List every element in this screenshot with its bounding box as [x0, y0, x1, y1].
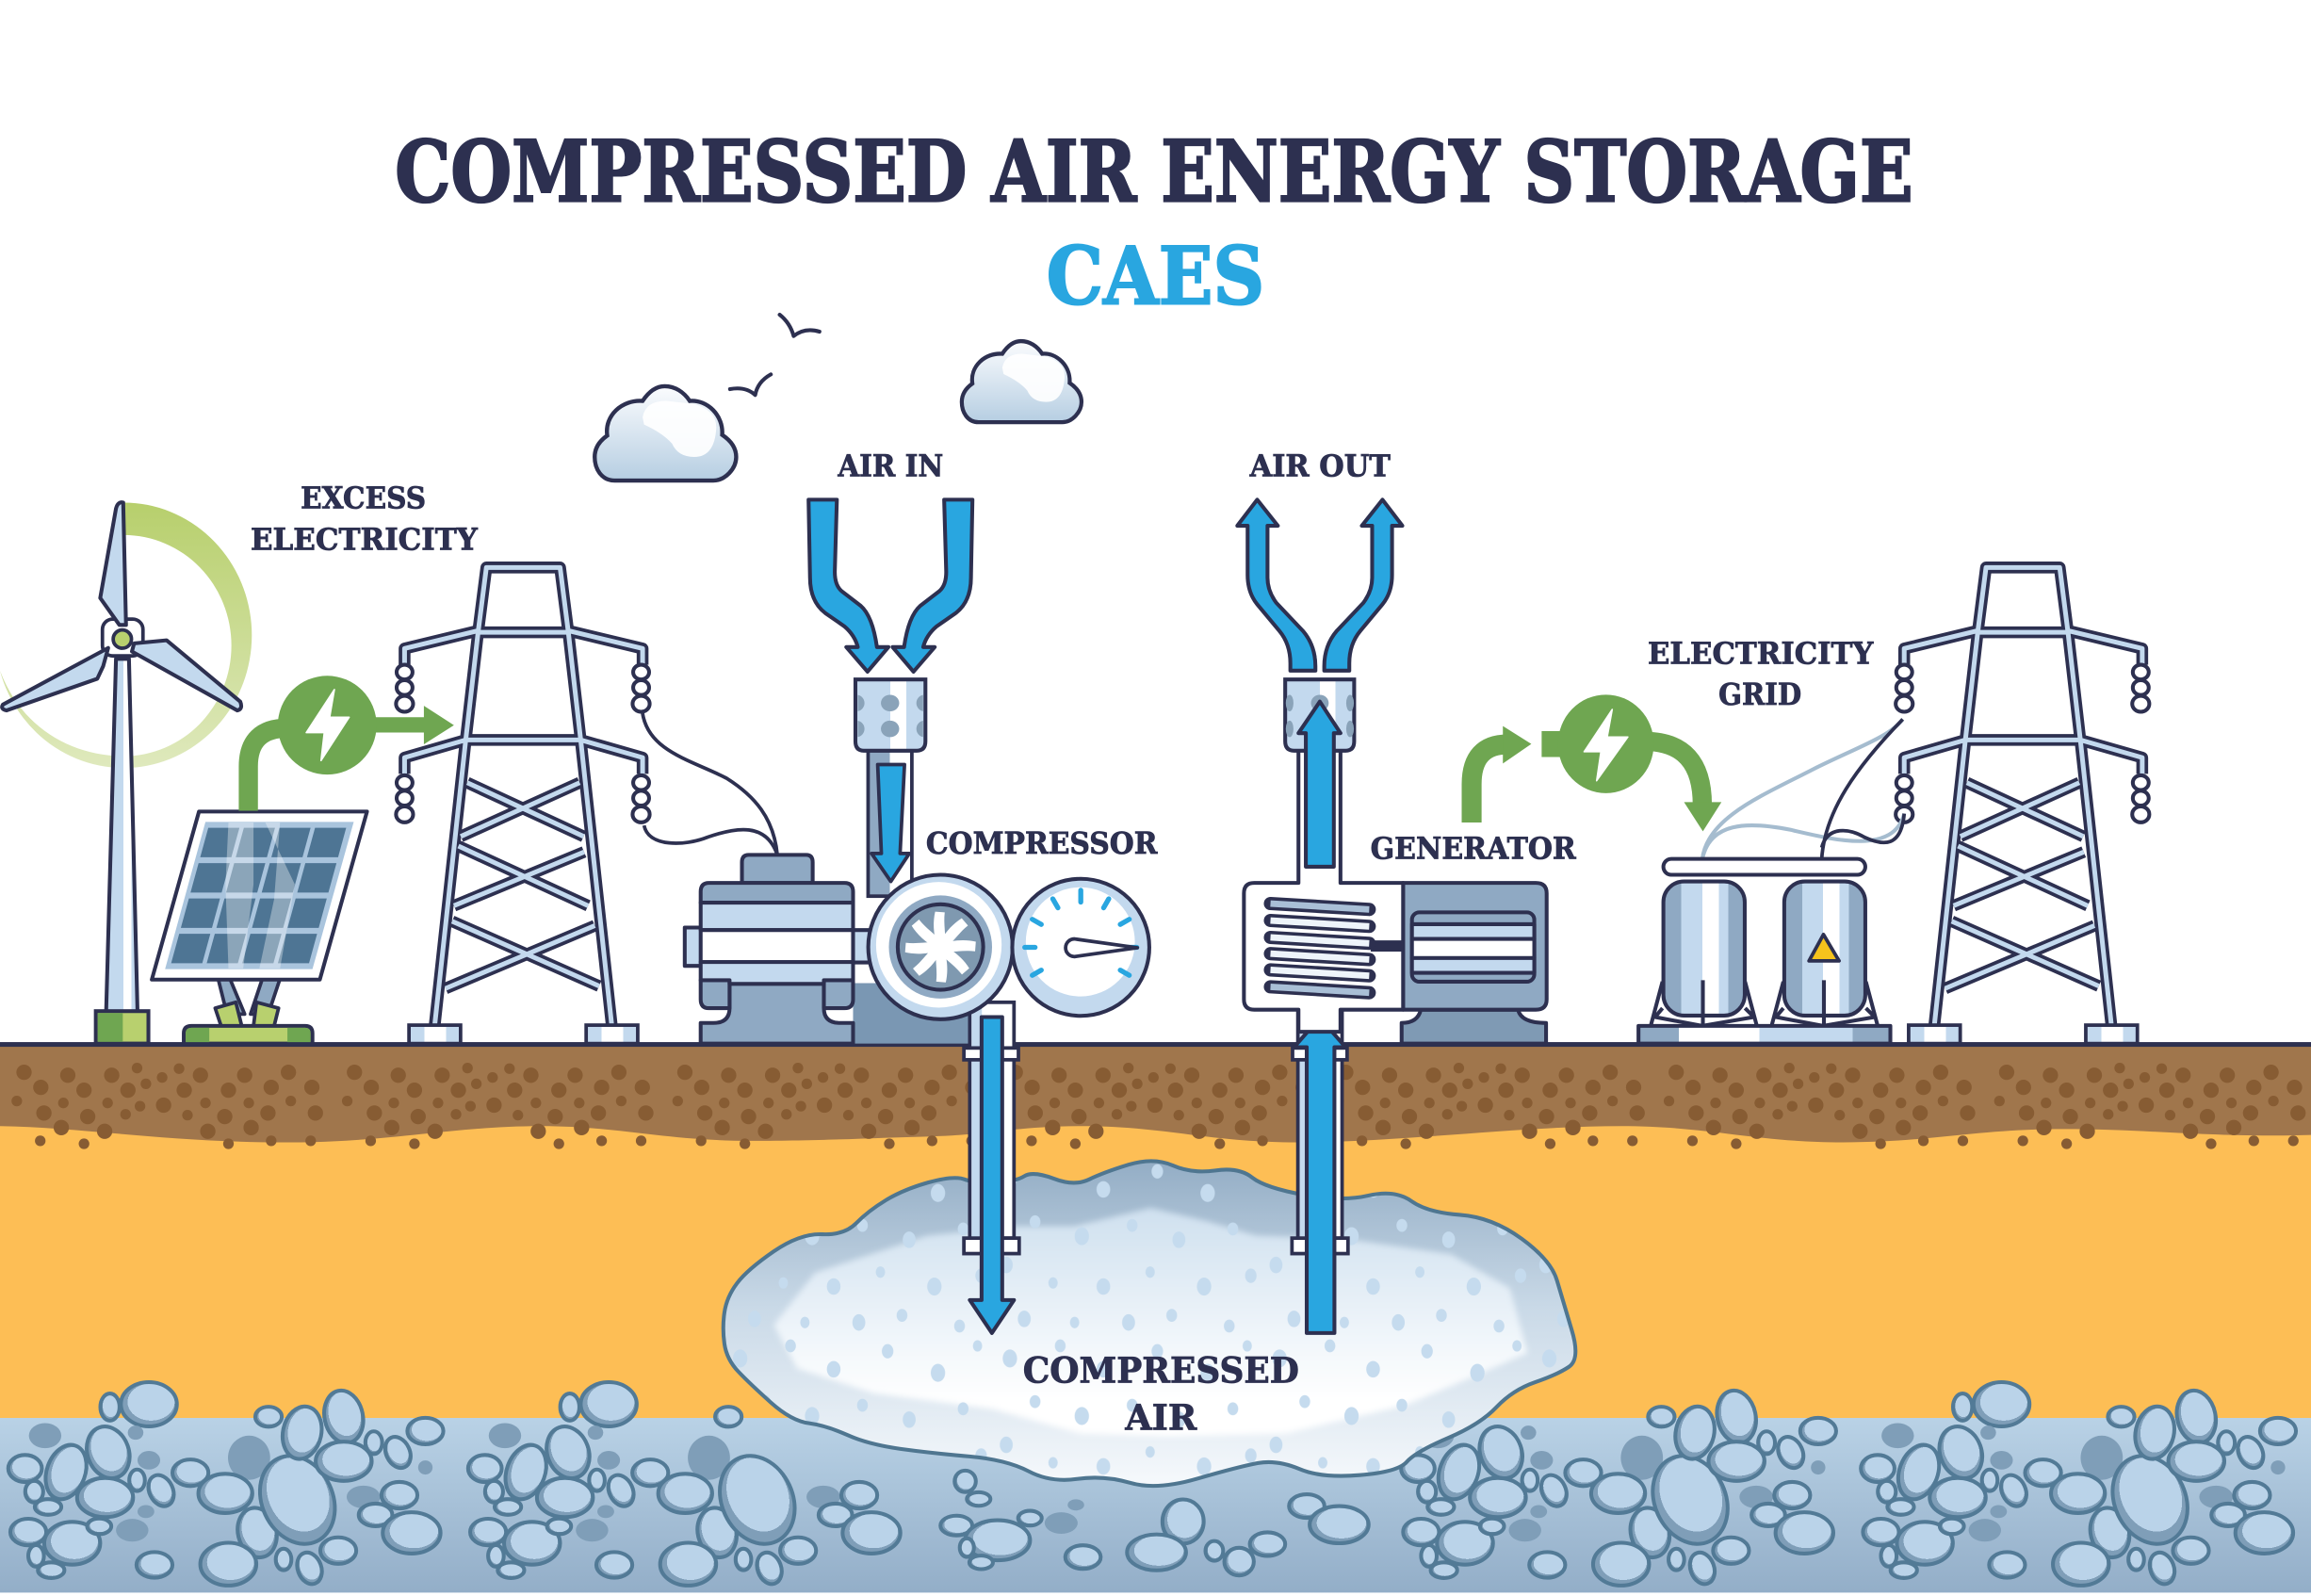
- label compressor: COMPRESSOR: [926, 825, 1158, 861]
- birds: [730, 315, 820, 395]
- generator: [1402, 883, 1547, 1044]
- air in arrows: [808, 499, 972, 672]
- underground pipe in: [964, 1002, 1019, 1333]
- green arrow generator to grid: [1472, 694, 1721, 831]
- air out arrows: [1237, 499, 1403, 671]
- turbine housing: [1244, 750, 1403, 1032]
- soil pebbles: [11, 1063, 2305, 1149]
- label electricity grid: GRID: [1718, 676, 1801, 712]
- pylon left: [396, 567, 650, 1044]
- cloud right: [962, 341, 1082, 422]
- title: COMPRESSED AIR ENERGY STORAGE: [395, 122, 1913, 222]
- label air in: AIR IN: [837, 448, 943, 483]
- cloud left: [594, 386, 736, 480]
- compressor turbine: [869, 875, 1013, 1019]
- underground pipe out: [1292, 1002, 1348, 1333]
- arrow rising to output: [1298, 702, 1341, 867]
- label compressed air: AIR: [1124, 1397, 1197, 1439]
- arrow in pipe: [871, 764, 909, 882]
- intake pipe: [868, 749, 912, 896]
- label excess electricity: EXCESS: [301, 480, 426, 516]
- rock layer: [0, 1418, 2311, 1592]
- transformer cables: [1702, 719, 1904, 859]
- label compressed air: COMPRESSED: [1023, 1349, 1299, 1391]
- power cables to motor: [643, 713, 777, 855]
- label excess electricity: ELECTRICITY: [251, 522, 479, 558]
- wind turbine: [0, 502, 252, 1044]
- label electricity grid: ELECTRICITY: [1648, 635, 1874, 671]
- soil layer: [0, 1044, 2311, 1143]
- solar panel: [152, 811, 367, 1044]
- label excess electricity: [251, 480, 479, 558]
- output filter: [1285, 679, 1354, 751]
- green arrow excess electricity: [249, 676, 454, 810]
- pressure gauge: [1012, 879, 1149, 1016]
- label compressed air: [1023, 1349, 1299, 1439]
- pylon right: [1896, 567, 2149, 1044]
- warning triangle: [1809, 935, 1839, 961]
- ground line: [0, 1042, 2311, 1047]
- cavern of compressed air: [724, 1161, 1575, 1486]
- subtitle: CAES: [1047, 229, 1264, 322]
- intake filter: [855, 679, 925, 751]
- label air out: AIR OUT: [1249, 448, 1391, 483]
- label electricity grid: [1648, 635, 1874, 712]
- transformer: [1638, 859, 1891, 1044]
- label generator: GENERATOR: [1371, 831, 1576, 867]
- rock pebbles: [8, 1382, 2296, 1588]
- sand layer: [0, 1091, 2311, 1444]
- motor: [685, 855, 872, 1044]
- compressor base block: [853, 983, 968, 1044]
